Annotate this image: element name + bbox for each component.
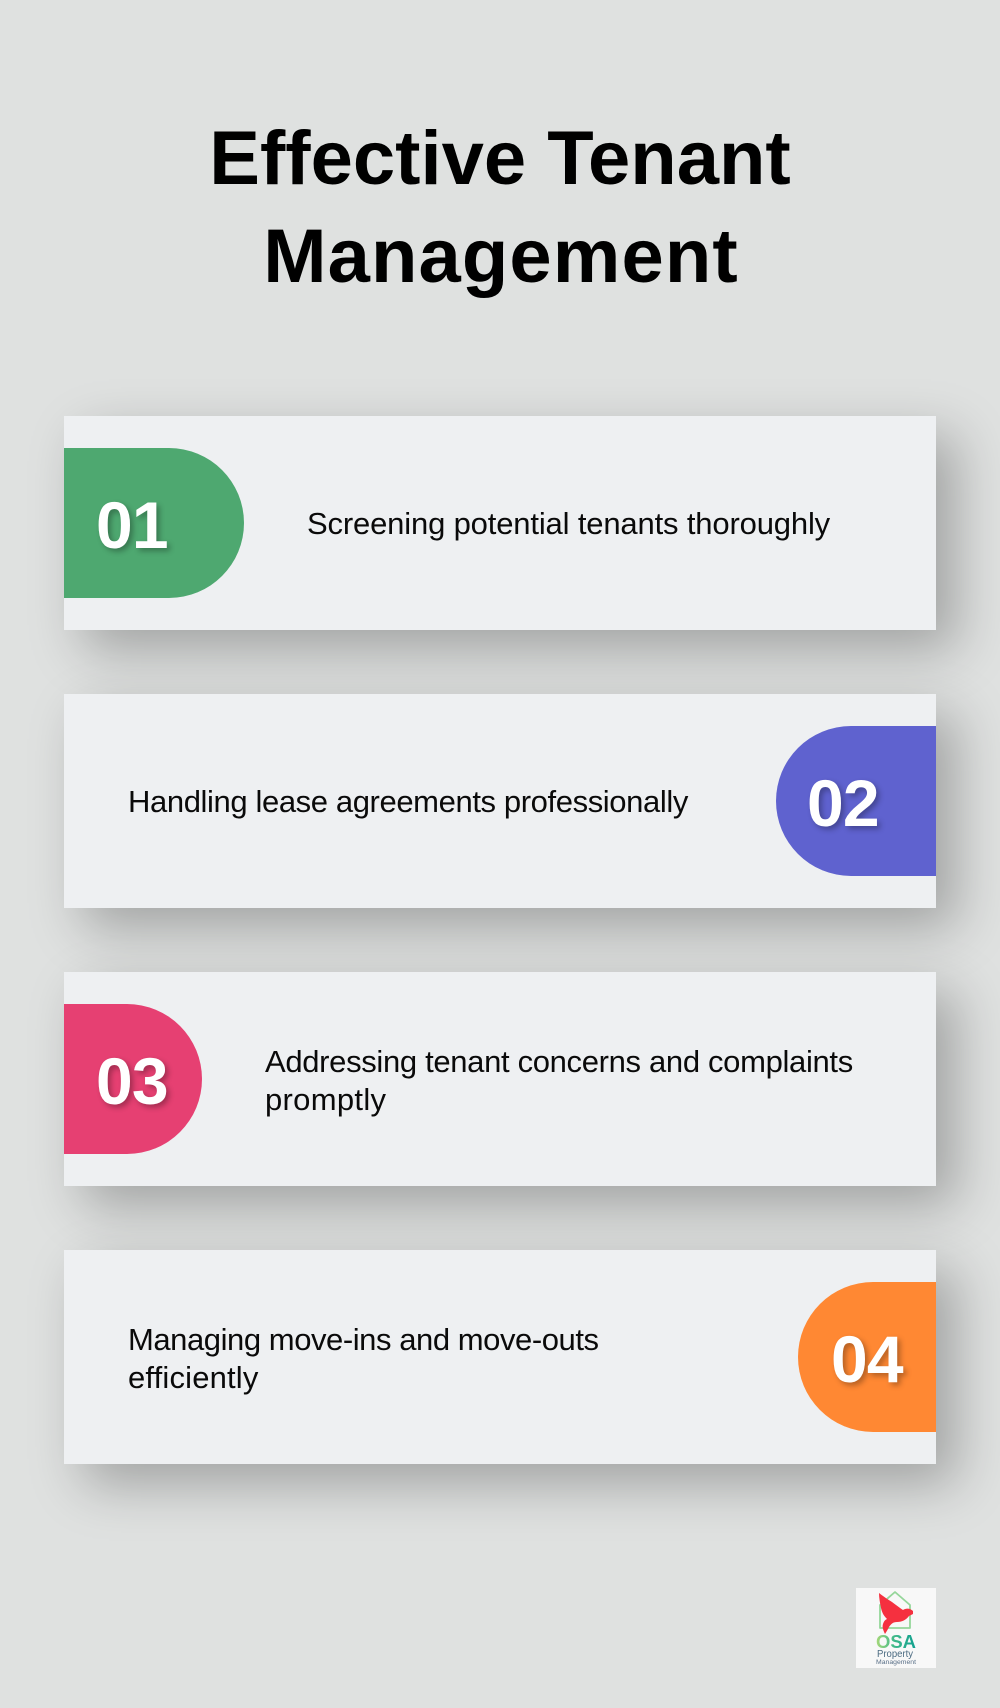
text: step 04 bbox=[128, 1322, 599, 1395]
text: step 01: Screening potential tenants thoroughly bbox=[307, 506, 830, 541]
panel: step 03 bbox=[64, 972, 936, 1186]
badge: 04 bbox=[798, 1282, 936, 1432]
panel: step 01 bbox=[64, 416, 936, 630]
text: step 04: Managing move-ins and move-outs bbox=[128, 1322, 599, 1357]
logo bbox=[856, 1588, 936, 1668]
panel: step 04 bbox=[64, 1250, 936, 1464]
logo wordmark: OSA bbox=[876, 1632, 916, 1652]
badge: 04: 04 bbox=[831, 1322, 903, 1396]
text: step 03 bbox=[265, 1044, 853, 1117]
icon: house outline bbox=[880, 1592, 910, 1628]
title bbox=[209, 116, 791, 299]
text: step 03: Addressing tenant concerns and complaints bbox=[265, 1044, 853, 1079]
badge: 03 bbox=[64, 1004, 202, 1154]
icon: red bird bbox=[879, 1593, 913, 1634]
text: step 04: efficiently bbox=[128, 1360, 259, 1395]
title: Effective Tenant bbox=[209, 116, 791, 201]
panel: step 02 bbox=[64, 694, 936, 908]
badge: 02: 02 bbox=[807, 766, 879, 840]
text: step 02: Handling lease agreements professionally bbox=[128, 784, 688, 819]
badge: 02 bbox=[776, 726, 936, 876]
badge: 03: 03 bbox=[96, 1044, 168, 1118]
text: step 03: promptly bbox=[265, 1082, 386, 1117]
logo subtitle 2: Management bbox=[876, 1659, 916, 1666]
badge: 01 bbox=[64, 448, 244, 598]
logo subtitle: Property bbox=[877, 1649, 913, 1660]
badge: 01: 01 bbox=[96, 488, 168, 562]
title: Management bbox=[263, 214, 739, 299]
